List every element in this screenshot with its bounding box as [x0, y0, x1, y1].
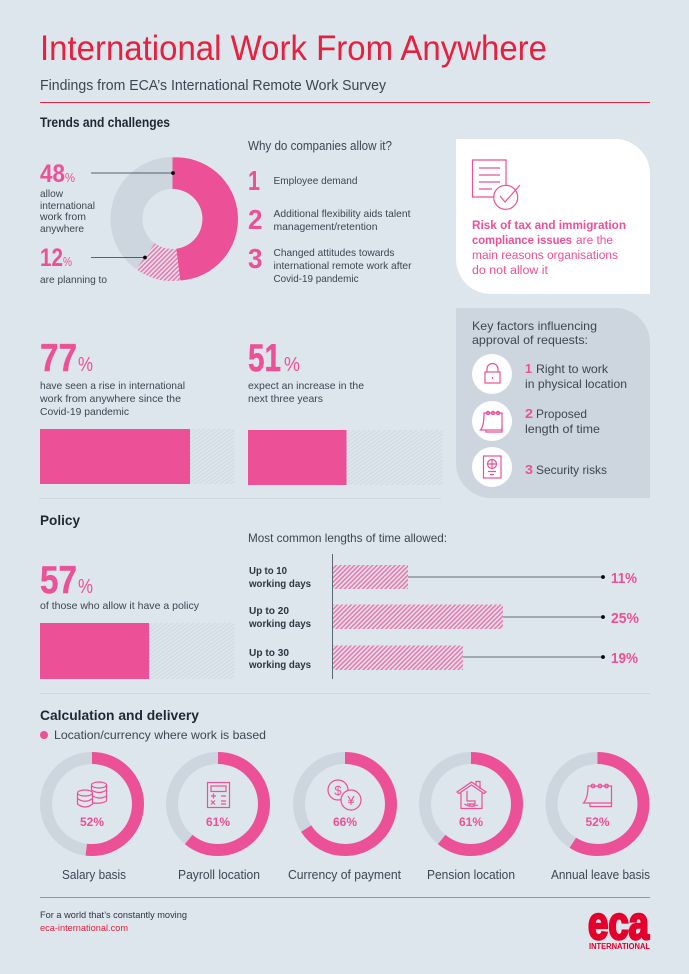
logo: eca international: INTERNATIONAL	[589, 942, 650, 951]
stat: 48% allow: %	[65, 170, 75, 185]
list: why do companies allow it: Additional flexibility aids talent	[274, 208, 411, 220]
row: up to 10 working days: working days	[248, 579, 311, 590]
stat: 12% planning: %	[63, 254, 72, 269]
ring: currency of payment 66%: 66%	[333, 815, 357, 829]
panel: key factors: Proposed	[536, 407, 587, 421]
panel: compliance risk: Risk of tax and immigration	[472, 220, 626, 232]
stat: 77% seen a rise: %	[78, 354, 93, 376]
ring: annual leave basis 52%: 52%	[585, 815, 610, 829]
title: International Work From Anywhere	[40, 29, 547, 68]
heading: policy: Policy	[40, 512, 80, 528]
ring: payroll location 61%	[172, 758, 264, 882]
panel: key factors: 1	[525, 361, 532, 376]
row: up to 20 working days: working days	[248, 619, 311, 630]
panel: key factors: length of time	[525, 422, 600, 436]
row: up to 30 working days	[248, 646, 638, 671]
footer text: eca-international.com	[40, 923, 128, 934]
stat: 57% have a policy: of those who allow it have a policy	[40, 600, 200, 612]
stat: 48% allow: allow	[40, 188, 63, 200]
stat: 77% seen a rise: 77	[40, 337, 77, 380]
panel: compliance risk: main reasons organisations	[472, 250, 618, 262]
ring: currency of payment 66%	[288, 758, 402, 882]
heading: calculation and delivery: Calculation and delivery	[40, 707, 199, 723]
stat: 48% allow: international	[40, 200, 95, 212]
logo: eca international: eca	[588, 897, 649, 949]
panel: compliance risk	[456, 139, 650, 294]
row: up to 20 working days: Up to 20	[249, 606, 289, 617]
panel: compliance risk: compliance issues	[472, 235, 572, 247]
stat: 57% have a policy: %	[78, 576, 93, 598]
row: up to 20 working days: 25%	[611, 610, 639, 627]
panel: key factors: 2	[525, 406, 533, 421]
list: why do companies allow it: international remote work after	[274, 260, 412, 272]
stat: 51% expect increase: next three years	[248, 393, 323, 405]
ring: payroll location 61%: 61%	[206, 815, 230, 829]
row: up to 30 working days: 19%	[611, 650, 638, 667]
list: why do companies allow it: Employee demand	[274, 175, 358, 187]
stat: 48% allow: 48	[40, 160, 65, 188]
list: why do companies allow it: Covid-19 pandemic	[274, 273, 358, 285]
ring: annual leave basis 52%: Annual leave basis	[551, 868, 650, 882]
icon: lock	[485, 364, 500, 383]
list: why do companies allow it: 1	[248, 165, 260, 196]
row: up to 10 working days	[248, 565, 637, 590]
panel: key factors: in physical location	[525, 377, 627, 391]
icon: currency coins	[328, 780, 361, 810]
icon: calculator	[208, 782, 230, 808]
ring: salary basis 52%: 52%	[80, 815, 104, 829]
stat: 57% have a policy: 57	[40, 559, 77, 602]
row: up to 30 working days: Up to 30	[249, 648, 289, 659]
legend: location/currency: Location/currency where work is based	[54, 728, 266, 742]
ring: salary basis 52%	[46, 758, 138, 882]
bar: 77%	[40, 429, 234, 484]
panel: key factors: approval of requests:	[472, 333, 588, 347]
ring: currency of payment 66%: Currency of payment	[288, 868, 402, 882]
ring: pension location 61%	[425, 758, 517, 882]
icon: coins	[78, 782, 106, 807]
stat: 48% allow: work from	[39, 211, 86, 223]
list: why do companies allow it: Changed attitudes towards	[274, 247, 394, 259]
stat: 48% allow: anywhere	[40, 223, 84, 235]
panel: compliance risk: do not allow it	[472, 265, 549, 277]
heading: trends and challenges: Trends and challenges	[40, 114, 170, 130]
panel: key factors: Security risks	[536, 463, 607, 477]
ring: pension location 61%: 61%	[459, 815, 483, 829]
footer text	[40, 910, 187, 934]
list: why do companies allow it: management/retention	[274, 221, 378, 233]
row: up to 30 working days: working days	[248, 660, 311, 671]
bar chart: lengths of time allowed: Most common lengths of time allowed:	[248, 531, 447, 545]
panel: compliance risk: are the	[576, 235, 613, 247]
stat: 51% expect increase: expect an increase in the	[248, 380, 364, 392]
panel: key factors: 3	[525, 462, 533, 477]
stat: 12% planning	[40, 244, 107, 286]
icon: calendar	[480, 411, 502, 432]
row: up to 10 working days: Up to 10	[249, 566, 287, 577]
bar chart: lengths of time allowed	[248, 531, 639, 679]
footer text: For a world that’s constantly moving	[40, 910, 187, 921]
list: why do companies allow it	[248, 139, 412, 285]
panel: key factors: Key factors influencing	[472, 319, 597, 333]
stat: 77% seen a rise: have seen a rise in international	[40, 380, 185, 392]
icon: passport	[484, 456, 501, 478]
stat: 51% expect increase: 51	[248, 337, 281, 380]
row: up to 20 working days	[248, 604, 639, 630]
icon: currency coins: ¥	[346, 793, 355, 808]
ring: annual leave basis 52%	[551, 758, 650, 882]
icon: currency coins: $	[334, 783, 342, 798]
row: up to 10 working days: 11%	[611, 570, 637, 587]
icon: calendar	[584, 784, 612, 806]
stat: 77% seen a rise	[39, 337, 185, 418]
subtitle: Findings from ECA’s International Remote Work Survey	[40, 78, 387, 94]
stat: 51% expect increase: %	[284, 354, 300, 376]
panel: key factors	[456, 308, 650, 498]
ring: pension location 61%: Pension location	[427, 868, 515, 882]
stat: 48% allow	[39, 160, 95, 235]
ring: payroll location 61%: Payroll location	[178, 868, 260, 882]
stat: 57% have a policy	[40, 559, 200, 612]
list: why do companies allow it: Why do companies allow it?	[248, 139, 392, 153]
donut chart: 48% allow, 12% planning	[91, 157, 238, 281]
stat: 12% planning: 12	[40, 244, 63, 272]
stat: 77% seen a rise: work from anywhere since the	[39, 393, 181, 405]
icon: house with rocking chair	[457, 782, 486, 808]
panel: key factors: Right to work	[536, 362, 609, 376]
bar: 51%	[248, 430, 442, 485]
stat: 12% planning: are planning to	[40, 274, 107, 286]
icon: document with check	[472, 160, 520, 209]
list: why do companies allow it: 2	[248, 204, 262, 235]
stat: 51% expect increase	[248, 337, 364, 405]
ring: salary basis 52%: Salary basis	[62, 868, 126, 882]
stat: 77% seen a rise: Covid-19 pandemic	[40, 406, 129, 418]
bar: 57%	[40, 623, 234, 679]
list: why do companies allow it: 3	[248, 243, 262, 274]
